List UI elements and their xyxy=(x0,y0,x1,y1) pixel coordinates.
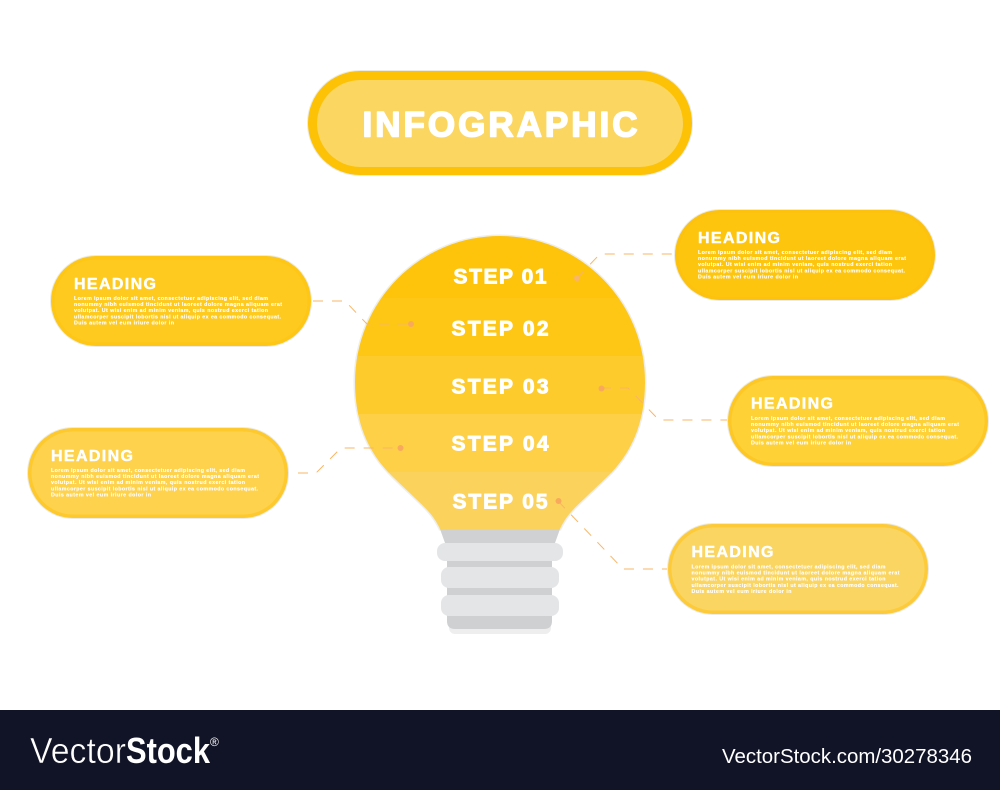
body text: volutpat. Ut wisi enim ad minim veniam, quis nostrud exerci tation xyxy=(74,308,268,314)
heading: HEADING xyxy=(692,544,774,561)
step labels: STEP 01 xyxy=(454,266,547,289)
body text: Lorem ipsum dolor sit amet, consectetuer adipiscing elit, sed diam xyxy=(74,296,268,302)
body text: volutpat. Ut wisi enim ad minim veniam, quis nostrud exerci tation xyxy=(751,428,945,434)
body text: nonummy nibh euismod tincidunt ut laoreet dolore magna aliquam erat xyxy=(74,302,282,308)
body text: Duis autem vel eum iriure dolor in xyxy=(751,440,851,446)
body text: Duis autem vel eum iriure dolor in xyxy=(692,589,792,595)
body text: nonummy nibh euismod tincidunt ut laoreet dolore magna aliquam erat xyxy=(698,256,906,262)
connector: step 01 xyxy=(574,254,675,281)
footer logo: Vector xyxy=(30,730,126,771)
body text: nonummy nibh euismod tincidunt ut laoreet dolore magna aliquam erat xyxy=(692,571,900,577)
heading: HEADING xyxy=(51,448,133,465)
body text: nonummy nibh euismod tincidunt ut laoreet dolore magna aliquam erat xyxy=(51,474,259,480)
body text: volutpat. Ut wisi enim ad minim veniam, quis nostrud exerci tation xyxy=(51,480,245,486)
body text: Lorem ipsum dolor sit amet, consectetuer adipiscing elit, sed diam xyxy=(751,416,945,422)
body text: Duis autem vel eum iriure dolor in xyxy=(51,492,151,498)
body text: Lorem ipsum dolor sit amet, consectetuer adipiscing elit, sed diam xyxy=(51,468,245,474)
heading: HEADING xyxy=(74,276,156,293)
title text: INFOGRAPHIC xyxy=(362,105,638,144)
title pill xyxy=(307,70,693,176)
body text: ullamcorper suscipit lobortis nisl ut aliquip ex ea commodo consequat. xyxy=(751,434,959,440)
step labels xyxy=(452,266,549,514)
body text xyxy=(51,468,259,498)
body text xyxy=(74,296,282,326)
body text: Duis autem vel eum iriure dolor in xyxy=(74,320,174,326)
body text: ullamcorper suscipit lobortis nisl ut aliquip ex ea commodo consequat. xyxy=(51,486,259,492)
bulb colour bands xyxy=(350,230,650,530)
card: step 05 heading lower right xyxy=(667,523,929,615)
heading: HEADING xyxy=(751,396,833,412)
body text xyxy=(698,250,906,280)
connector: step 05 xyxy=(556,498,668,569)
footer logo: ® xyxy=(210,735,219,749)
step labels: STEP 05 xyxy=(452,491,548,514)
card: step 04 heading left xyxy=(27,427,289,519)
body text: Lorem ipsum dolor sit amet, consectetuer adipiscing elit, sed diam xyxy=(698,250,892,256)
body text: Lorem ipsum dolor sit amet, consectetuer adipiscing elit, sed diam xyxy=(692,564,886,570)
step labels: STEP 03 xyxy=(452,376,548,399)
body text xyxy=(751,416,959,446)
connector: step 03 xyxy=(598,386,728,420)
body text: nonummy nibh euismod tincidunt ut laoreet dolore magna aliquam erat xyxy=(751,422,959,428)
body text: volutpat. Ut wisi enim ad minim veniam, quis nostrud exerci tation xyxy=(692,577,886,583)
body text: Duis autem vel eum iriure dolor in xyxy=(698,274,798,280)
bulb outline xyxy=(355,236,645,529)
footer url: VectorStock.com/30278346 xyxy=(722,745,972,768)
body text: ullamcorper suscipit lobortis nisl ut aliquip ex ea commodo consequat. xyxy=(692,583,899,589)
body text: ullamcorper suscipit lobortis nisl ut aliquip ex ea commodo consequat. xyxy=(698,268,906,274)
light bulb xyxy=(350,230,650,634)
bulb base xyxy=(437,529,563,634)
heading: HEADING xyxy=(698,230,780,247)
card: step 02 heading left xyxy=(50,255,312,347)
card: step 01 heading top right xyxy=(674,209,936,301)
body text xyxy=(692,564,900,595)
step labels: STEP 02 xyxy=(452,318,548,341)
card: step 03 heading right xyxy=(727,375,989,467)
footer bar xyxy=(0,710,1000,790)
footer logo xyxy=(30,730,219,771)
step labels: STEP 04 xyxy=(452,433,549,456)
body text: volutpat. Ut wisi enim ad minim veniam, quis nostrud exerci tation xyxy=(698,262,892,268)
body text: ullamcorper suscipit lobortis nisl ut aliquip ex ea commodo consequat. xyxy=(74,314,282,320)
connector: step 04 xyxy=(298,445,404,473)
footer logo: Stock xyxy=(126,730,211,771)
connector: step 02 xyxy=(313,301,414,327)
